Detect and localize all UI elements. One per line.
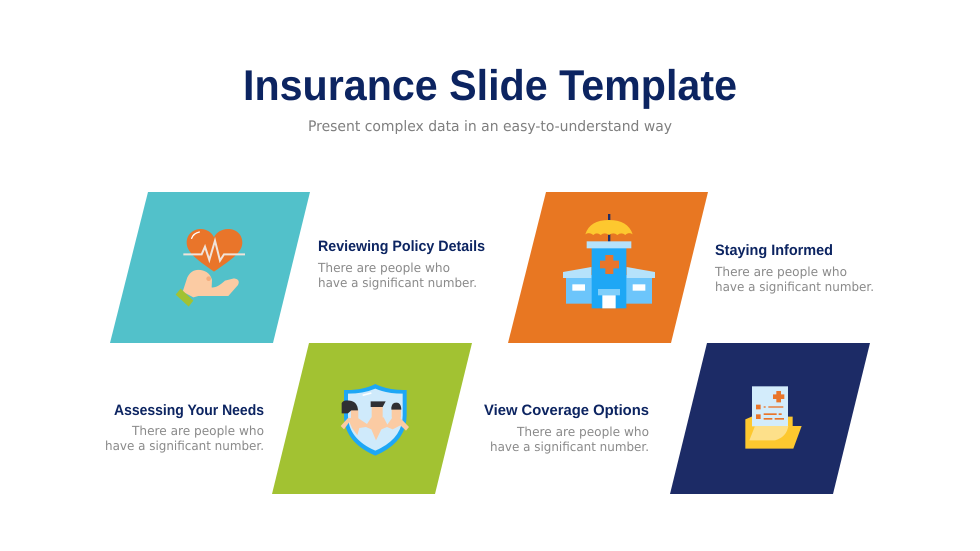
teal parallelogram [110,192,310,343]
body text: There are people who [714,264,847,279]
subtitle: Present complex data in an easy-to-understand way [308,119,672,135]
heading: Assessing Your Needs [114,402,264,419]
panel: staying informed [508,192,874,343]
body text: There are people who [516,424,649,439]
body text [105,423,264,453]
body text [714,264,874,294]
orange parallelogram [508,192,708,343]
body text: have a significant number. [715,279,874,294]
heading: View Coverage Options [484,402,649,419]
heading: Reviewing Policy Details [318,238,485,255]
body text: There are people who [131,423,264,438]
icon: people in shield [341,384,409,456]
panel: reviewing policy details [110,192,485,343]
navy parallelogram [670,343,870,494]
body text: have a significant number. [105,438,264,453]
icon: heart in hand [176,229,245,307]
panel: assessing your needs [105,343,472,494]
title: Insurance Slide Template [243,62,737,110]
body text [317,260,477,290]
green parallelogram [272,343,472,494]
body text: have a significant number. [490,439,649,454]
body text: have a significant number. [318,275,477,290]
heading: Staying Informed [715,242,833,259]
icon: hospital with umbrella [563,214,655,308]
body text: There are people who [317,260,450,275]
body text [490,424,649,454]
panel: view coverage options [484,343,870,494]
icon: document in folder [745,386,802,449]
